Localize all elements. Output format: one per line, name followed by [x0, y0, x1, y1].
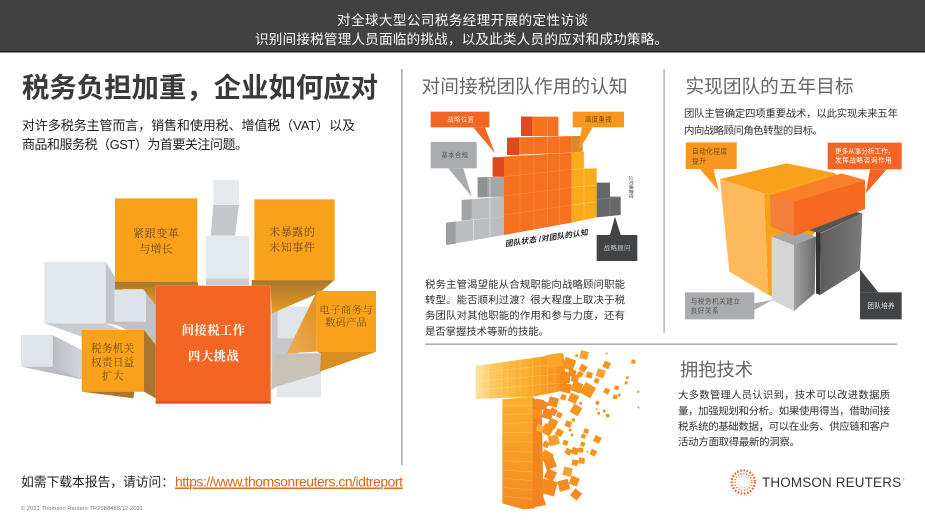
callout: automation: 自动化程度	[692, 146, 727, 155]
download link line: https://www.thomsonreuters.cn/idtreport	[175, 474, 403, 490]
copyright: © 2021 Thomson Reuters TR2088488/12-2021	[21, 505, 143, 512]
text block: embrace technology: 大多数管理人员认识到，技术可以改进数据质	[678, 388, 890, 402]
left column dividers	[401, 69, 897, 465]
callout: tax authority relations	[685, 292, 772, 319]
callout: tax authority relations: 良好关系	[691, 306, 719, 315]
axis label: team status: 团队状态 /对团队的认知	[504, 228, 590, 248]
callout: basic compliance	[431, 142, 477, 197]
block: tax authority powers	[82, 330, 156, 398]
callout: automation: 提升	[692, 156, 706, 165]
callout: basic compliance: 基本合规	[441, 150, 469, 159]
header text line 2: 识别间接税管理人员面临的挑战，以及此类人员的应对和成功策略。	[255, 31, 668, 47]
header banner	[0, 0, 925, 52]
download link line	[21, 474, 403, 490]
intro text: 对许多税务主管而言，销售和使用税、增值税（VAT）以及	[22, 118, 355, 133]
block: e-commerce and digital products: 数码产品	[325, 316, 367, 329]
logo registered mark: ®	[902, 477, 905, 482]
callout: high attention: 高度重视	[585, 115, 612, 124]
light grey box	[772, 230, 816, 311]
download link line: 如需下载本报告，请访问：	[21, 474, 174, 490]
callout: high attention	[573, 112, 624, 152]
callout: tax authority relations: 与税务机关建立	[691, 297, 740, 306]
text block: embrace technology: 税系统的基础数据，可以在业务、供应链和客户	[678, 420, 890, 433]
text block: role perception: 是否掌握技术等新的技能。	[425, 325, 549, 338]
callout: strategic position: 战略位置	[447, 115, 474, 124]
panel title: five year goals: 实现团队的五年目标	[686, 76, 854, 97]
block: e-commerce and digital products: 电子商务与	[319, 304, 373, 317]
panel title: embrace technology: 拥抱技术	[680, 360, 753, 380]
yellow bricks	[572, 136, 597, 223]
orange bricks	[493, 117, 572, 235]
text block: role perception: 转型。能否顺利过渡？很大程度上取决于税	[425, 294, 626, 306]
block: unknown events: 未知事件	[269, 240, 315, 254]
grey blocks	[21, 180, 321, 397]
block: tax authority powers: 税务机关	[91, 342, 135, 355]
text block: embrace technology: 量，加强规划和分析。如果使用得当，借助间接	[678, 404, 890, 418]
text block: five year goals	[684, 107, 898, 137]
chart: four challenges block cluster	[21, 180, 377, 404]
intro text: 商品和服务税（GST）为首要关注问题。	[22, 137, 248, 152]
chart: stepped brick wall	[431, 112, 637, 261]
callout: strategic adviser	[597, 217, 637, 261]
dark grey box	[808, 212, 862, 295]
callout: strategic adviser: 战略顾问	[604, 243, 630, 252]
logo wordmark: THOMSON REUTERS	[762, 475, 901, 490]
T crossbar	[476, 353, 567, 399]
logo dotted globe	[732, 470, 755, 494]
chart: 3D cube of goals	[685, 142, 902, 319]
callout: automation	[686, 142, 737, 191]
block: unknown events: 未暴露的	[269, 224, 315, 238]
axis label: company importance: 公司重要性	[628, 175, 633, 199]
orange bar	[770, 173, 865, 236]
callout: team development: 团队培养	[867, 301, 895, 310]
logo: Thomson Reuters	[732, 470, 905, 494]
panel title: role perception: 对间接税团队作用的认知	[422, 76, 628, 97]
main title: 税务负担加重，企业如何应对	[22, 72, 378, 103]
text block: embrace technology: 活动方面取得最新的洞察。	[678, 436, 800, 448]
callout: strategic position	[431, 112, 495, 153]
large amber cube	[720, 163, 840, 297]
grey bricks	[446, 177, 504, 245]
text block: embrace technology	[678, 388, 890, 448]
header text line 1: 对全球大型公司税务经理开展的定性访谈	[337, 12, 588, 28]
block: centre, four challenges: 间接税工作	[182, 322, 246, 337]
callout: analytics work: 更多从事分析工作，	[835, 146, 894, 155]
callout: analytics work: 发挥战略咨询作用	[835, 155, 892, 164]
block: keep pace with change and growth	[115, 198, 199, 305]
block: tax authority powers: 扩大	[102, 369, 124, 382]
T stem	[502, 397, 546, 509]
intro text	[22, 118, 355, 152]
callout: analytics work	[828, 143, 902, 193]
block: keep pace with change and growth: 与增长	[139, 242, 173, 256]
illustration: letter T made of cubes	[476, 350, 639, 509]
block: keep pace with change and growth: 紧跟变革	[133, 226, 179, 240]
dark bricks	[597, 183, 621, 217]
flying cube particles	[532, 350, 639, 501]
block: tax authority powers: 权责日益	[91, 356, 135, 369]
block: e-commerce and digital products	[287, 291, 377, 372]
block: unknown events	[252, 199, 335, 313]
text block: role perception	[425, 278, 626, 338]
text block: five year goals: 内向战略顾问角色转型的目标。	[684, 124, 823, 137]
text block: role perception: 税务主管渴望能从合规职能向战略顾问职能	[425, 278, 625, 291]
text block: role perception: 务团队对其他职能的作用和参与力度，还有	[425, 309, 625, 322]
callout: team development	[860, 269, 902, 319]
block: centre, four challenges	[156, 286, 271, 404]
block: centre, four challenges: 四大挑战	[188, 348, 239, 363]
text block: five year goals: 团队主管确定四项重要战术，以此实现未来五年	[684, 107, 898, 120]
